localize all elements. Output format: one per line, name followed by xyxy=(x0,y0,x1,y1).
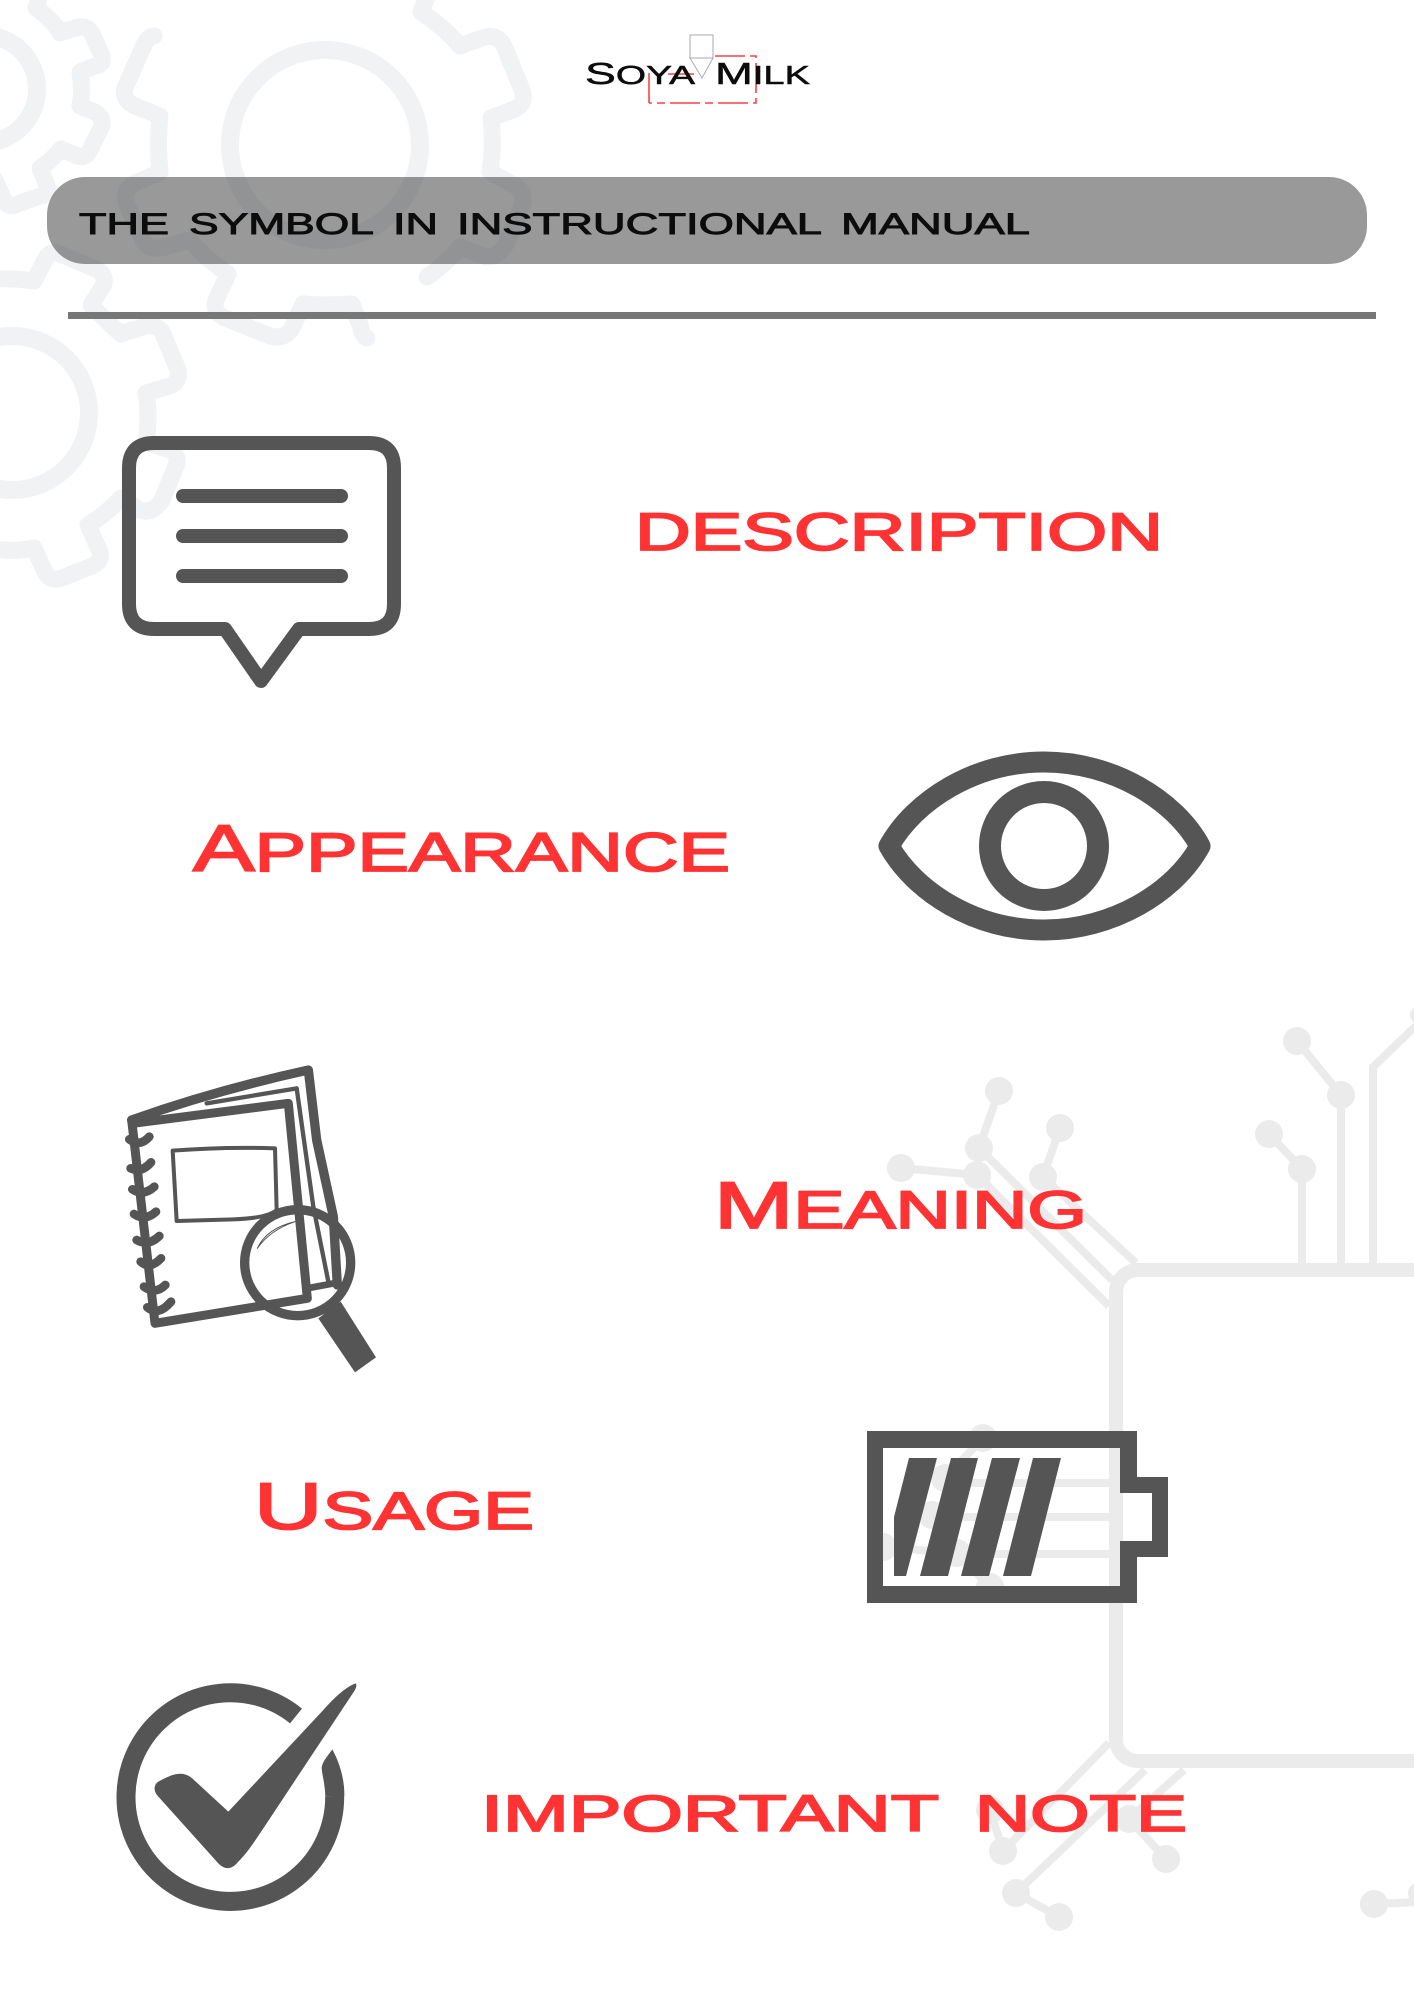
label: usage: U SAGE xyxy=(254,1469,534,1543)
background gears xyxy=(0,0,523,579)
label: appearance: A PPEARANCE xyxy=(193,811,730,885)
title: SYMBOL xyxy=(189,208,374,241)
label: important note xyxy=(481,1785,1187,1842)
icon: speech bubble xyxy=(129,443,394,681)
background circuit board xyxy=(869,1007,1414,1931)
icon: check mark in circle xyxy=(126,1683,356,1901)
title xyxy=(79,208,1030,241)
label: meaning: M EANING xyxy=(714,1168,1087,1242)
logo wordmark: M ILK xyxy=(715,56,811,91)
label: description: DESCRIPTION xyxy=(635,503,1163,562)
row: meaning xyxy=(129,1070,1087,1372)
icon: battery xyxy=(867,1431,1168,1603)
divider rule xyxy=(68,312,1376,319)
label: important note: NOTE xyxy=(975,1785,1187,1842)
row: description xyxy=(129,443,1163,681)
title banner xyxy=(47,177,1367,264)
title: THE xyxy=(79,208,169,241)
title: MANUAL xyxy=(841,208,1030,241)
logo: red dashed frame xyxy=(649,56,756,103)
row: appearance xyxy=(193,762,1200,930)
logo: Soya Milk xyxy=(585,35,811,103)
logo wordmark: S OYA xyxy=(585,56,696,91)
label: important note: IMPORTANT xyxy=(481,1785,939,1842)
icon: eye xyxy=(889,762,1200,930)
icon: notebook with magnifying glass xyxy=(129,1070,376,1372)
logo: pin marker xyxy=(690,35,713,78)
logo wordmark xyxy=(585,56,811,91)
row: important note xyxy=(126,1683,1187,1901)
title: INSTRUCTIONAL xyxy=(457,208,822,241)
title: IN xyxy=(393,208,438,241)
row: usage xyxy=(254,1431,1168,1603)
